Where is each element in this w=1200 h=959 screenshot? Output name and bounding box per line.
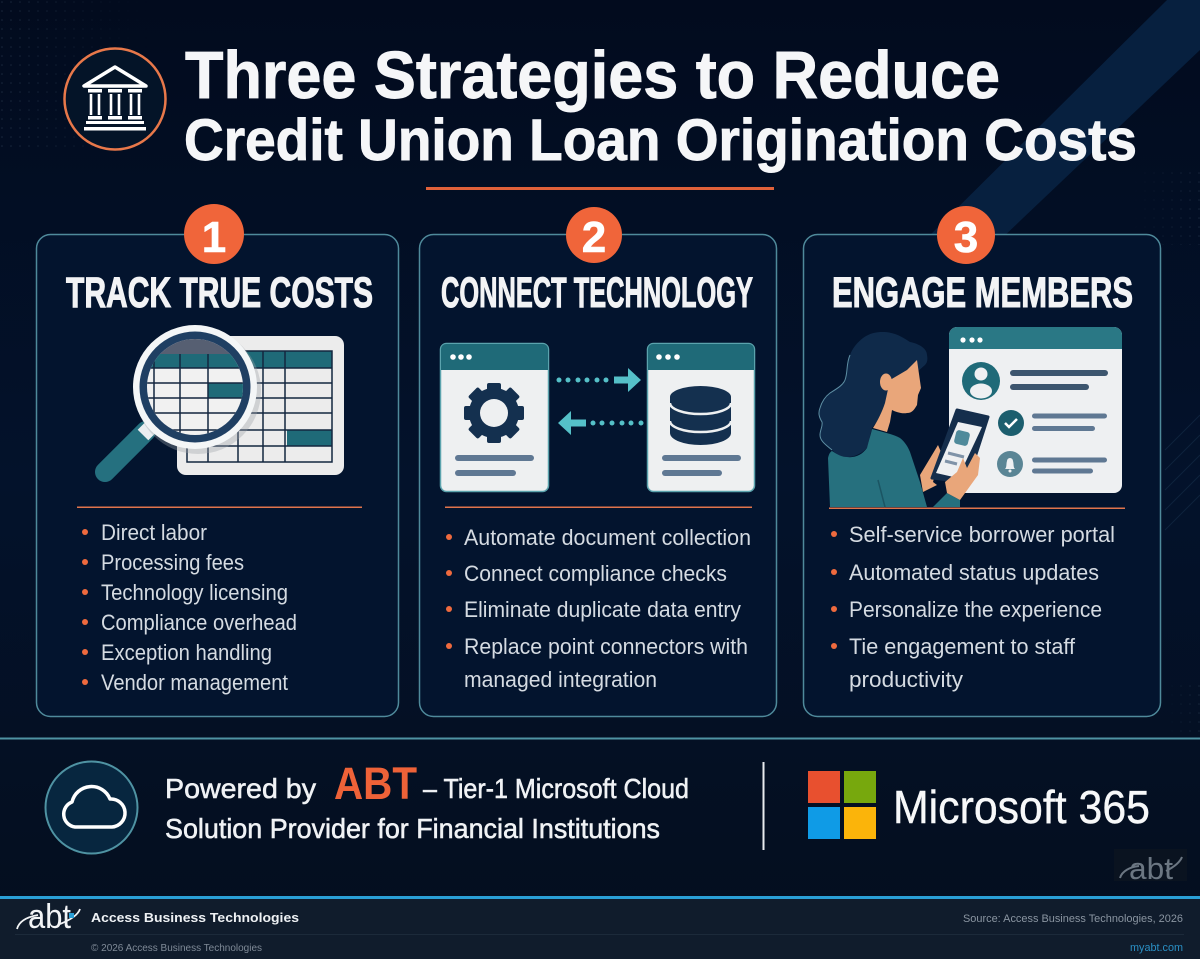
bullet list 3: productivity xyxy=(849,667,963,692)
logo: abt: abt xyxy=(28,898,72,936)
bullet list 3: Tie engagement to staff xyxy=(849,634,1076,659)
arrow: left xyxy=(558,411,644,435)
divider above banner xyxy=(0,738,1200,740)
heading: CONNECT TECHNOLOGY xyxy=(441,269,753,317)
powered by statement: ABT xyxy=(334,758,417,809)
bullet list 1: Processing fees xyxy=(101,550,244,575)
banner divider xyxy=(762,762,764,850)
panel: engage members xyxy=(804,206,1160,716)
title: Credit Union Loan Origination Costs xyxy=(184,108,1137,173)
bullet list 1: Compliance overhead xyxy=(101,610,297,635)
bullet list 2 xyxy=(446,525,751,692)
bullet list 3: Automated status updates xyxy=(849,560,1099,585)
copyright: © 2026 Access Business Technologies xyxy=(91,943,262,954)
company name: Access Business Technologies xyxy=(91,910,299,925)
bullet list 2: Connect compliance checks xyxy=(464,561,727,586)
icon: spreadsheet and magnifier xyxy=(105,325,344,475)
watermark logo: abt xyxy=(1129,851,1173,886)
logo: microsoft 365: Microsoft 365 xyxy=(893,781,1150,833)
watermark logo xyxy=(1114,849,1187,886)
title: Three Strategies to Reduce xyxy=(185,38,1000,113)
panel: connect technology xyxy=(420,207,776,716)
bullet list 1: Exception handling xyxy=(101,640,272,665)
source: Source: Access Business Technologies, 2026 xyxy=(963,913,1183,925)
powered by statement: Solution Provider for Financial Institutions xyxy=(165,813,660,844)
icon: member portal window xyxy=(949,327,1122,493)
website: myabt.com xyxy=(1130,942,1183,954)
powered by statement: – Tier-1 Microsoft Cloud xyxy=(423,773,689,804)
bullet list 1: Direct labor xyxy=(101,520,207,545)
badge 3: 3 xyxy=(954,213,978,262)
powered by statement xyxy=(165,758,689,844)
badge 1: 1 xyxy=(202,213,226,262)
bullet list 3: Self-service borrower portal xyxy=(849,522,1115,547)
bullet list 1: Vendor management xyxy=(101,670,288,695)
icon: app window with gear xyxy=(440,344,548,492)
arrow: right xyxy=(556,368,641,392)
title xyxy=(184,38,1137,173)
bullet list 3 xyxy=(831,522,1115,692)
bullet list 2: Automate document collection xyxy=(464,525,751,550)
bullet list 1: Technology licensing xyxy=(101,580,288,605)
heading: TRACK TRUE COSTS xyxy=(66,269,373,317)
badge 2: 2 xyxy=(582,213,606,262)
title underline xyxy=(426,187,774,190)
icon: bank building xyxy=(64,48,166,150)
badge 3 xyxy=(937,206,995,264)
bullet list 2: Replace point connectors with xyxy=(464,634,748,659)
footer xyxy=(0,896,1200,959)
logo: microsoft 365 xyxy=(808,771,1150,839)
icon: woman with phone xyxy=(819,332,988,507)
badge 2 xyxy=(566,207,622,263)
powered by statement: Powered by xyxy=(165,773,316,804)
bullet list 1 xyxy=(82,520,297,695)
bullet list 3: Personalize the experience xyxy=(849,597,1102,622)
bullet list 2: managed integration xyxy=(464,667,657,692)
panel: track true costs xyxy=(36,204,398,716)
background xyxy=(1,0,1200,732)
icon: cloud xyxy=(46,762,138,854)
badge 1 xyxy=(184,204,244,264)
icon: app window with database xyxy=(648,344,754,492)
bullet list 2: Eliminate duplicate data entry xyxy=(464,597,741,622)
